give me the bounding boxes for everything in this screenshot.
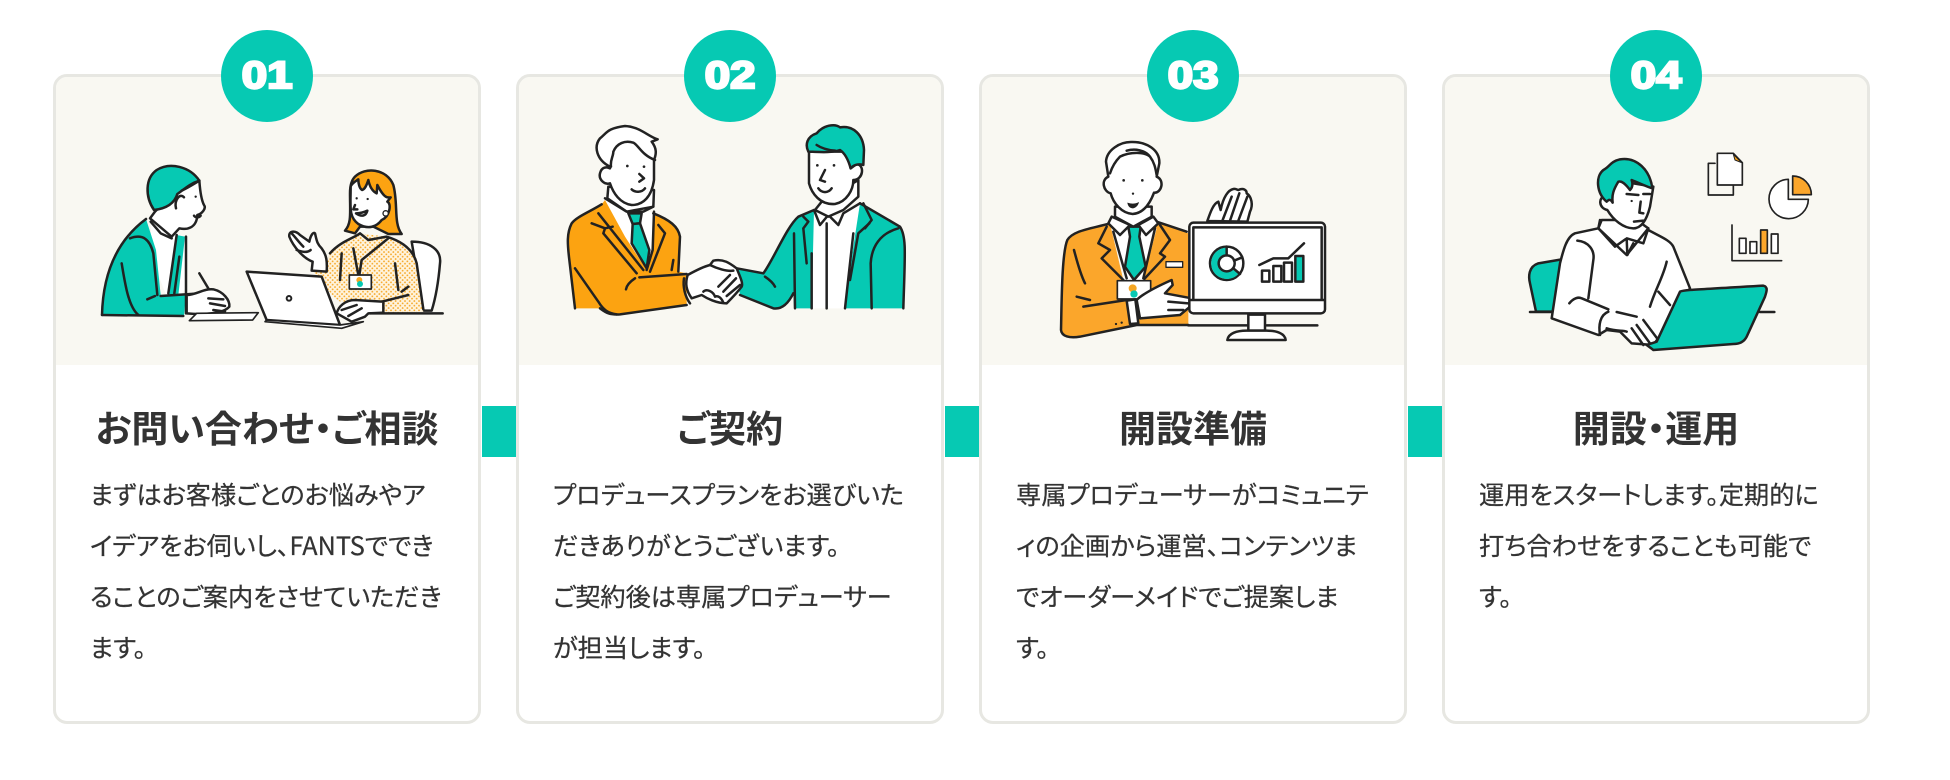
number badge 02: 02 bbox=[705, 55, 755, 97]
woman: chair bbox=[412, 242, 440, 311]
text: step 1: ることのご案内をさせていただき bbox=[90, 578, 442, 614]
number badge 03: 03 bbox=[1168, 55, 1218, 97]
bar chart icon bbox=[1732, 225, 1782, 261]
body bbox=[1552, 228, 1690, 345]
text: step 2 bbox=[553, 476, 904, 665]
connector 2-3 bbox=[945, 406, 979, 457]
text: step 4: す。 bbox=[1479, 578, 1512, 614]
number badge 01: 01 bbox=[242, 55, 292, 97]
text: step 2: が担当します。 bbox=[553, 629, 705, 665]
head bbox=[1104, 142, 1162, 227]
connector 1-2 bbox=[482, 406, 516, 457]
heading: step 2: ご契約 bbox=[677, 399, 783, 453]
panel: step 3 bbox=[979, 74, 1407, 724]
text: step 2: プロデュースプランをお選びいた bbox=[553, 476, 904, 512]
text: step 2: だきありがとうございます。 bbox=[553, 527, 839, 563]
illustration: consultation at desk bbox=[100, 164, 444, 330]
donut chart bbox=[1210, 247, 1243, 280]
text: step 3 bbox=[1016, 476, 1369, 665]
laptop bbox=[1647, 286, 1767, 350]
text: step 4 bbox=[1479, 476, 1819, 614]
woman: hand on laptop bbox=[337, 300, 383, 322]
woman: lanyard and badge bbox=[349, 238, 388, 289]
documents icon bbox=[1708, 153, 1742, 195]
heading: step 1: お問い合わせ・ご相談 bbox=[96, 399, 438, 453]
text: step 3: 専属プロデューサーがコミュニテ bbox=[1016, 476, 1369, 512]
panel: step 2 bbox=[516, 74, 944, 724]
woman: head bbox=[345, 170, 402, 234]
text: step 3: す。 bbox=[1016, 629, 1049, 665]
connector 3-4 bbox=[1408, 406, 1442, 457]
number badge 04 bbox=[1610, 30, 1702, 122]
number badge 02 bbox=[684, 30, 776, 122]
text: step 4: 運用をスタートします。定期的に bbox=[1479, 476, 1819, 512]
heading: step 3: 開設準備 bbox=[1119, 399, 1267, 453]
suit bbox=[1061, 222, 1188, 337]
illustration: handshake bbox=[566, 124, 906, 316]
monitor bbox=[1188, 223, 1325, 340]
left man: suit bbox=[568, 198, 687, 314]
bar chart bbox=[1259, 243, 1304, 282]
number badge 01 bbox=[221, 30, 313, 122]
left man: head bbox=[597, 126, 658, 212]
badge bbox=[1117, 281, 1151, 299]
text: step 3: でオーダーメイドでご提案しま bbox=[1016, 578, 1339, 614]
panel: step 4 bbox=[1442, 74, 1870, 724]
text: step 2: ご契約後は専属プロデューサー bbox=[553, 578, 892, 614]
number badge 03 bbox=[1147, 30, 1239, 122]
notebook bbox=[189, 313, 258, 321]
text: step 1: ます。 bbox=[90, 629, 146, 665]
panel: step 1 bbox=[53, 74, 481, 724]
illustration: man at laptop bbox=[1528, 152, 1812, 352]
woman: blouse bbox=[313, 233, 423, 313]
desk line bbox=[1530, 308, 1774, 316]
text: step 3: ィの企画から運営、コンテンツま bbox=[1016, 527, 1357, 563]
pie chart icon bbox=[1769, 176, 1811, 219]
head bbox=[1598, 159, 1653, 255]
right man: head bbox=[807, 125, 864, 217]
chair bbox=[1529, 259, 1562, 312]
man: jacket bbox=[102, 218, 200, 316]
number badge 04: 04 bbox=[1631, 55, 1681, 97]
illustration: presenter with monitor bbox=[1060, 140, 1326, 342]
heading: step 4: 開設・運用 bbox=[1573, 399, 1739, 453]
man: head bbox=[148, 166, 205, 237]
pointing hand bbox=[1127, 280, 1192, 324]
text: step 1 bbox=[90, 476, 442, 665]
laptop bbox=[247, 272, 363, 328]
text: step 1: イデアをお伺いし、FANTSででき bbox=[90, 527, 433, 563]
raised hand bbox=[1207, 189, 1252, 222]
right man: suit bbox=[737, 203, 905, 309]
text: step 4: 打ち合わせをすることも可能で bbox=[1479, 527, 1811, 563]
shirt and tie bbox=[1108, 217, 1158, 280]
handshake bbox=[684, 260, 742, 303]
text: step 1: まずはお客様ごとのお悩みやア bbox=[90, 476, 426, 512]
pocket square bbox=[1166, 262, 1183, 267]
woman: raised hand bbox=[289, 232, 327, 272]
man: hand and pen bbox=[187, 273, 229, 314]
